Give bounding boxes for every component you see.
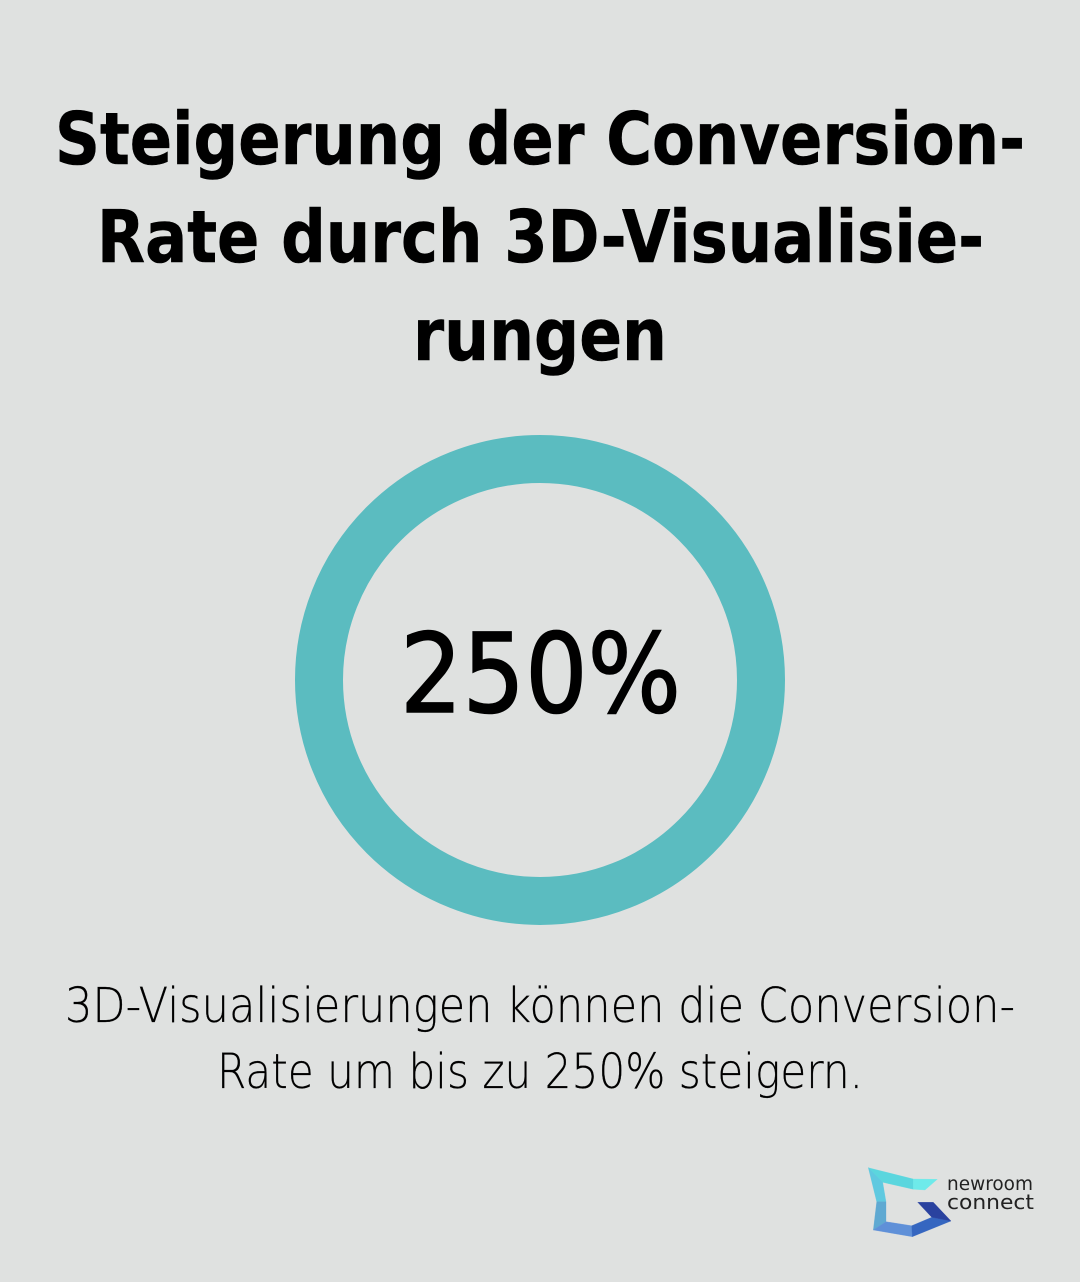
title	[55, 97, 1025, 377]
logo wordmark: newroom	[947, 1174, 1033, 1195]
description text	[65, 978, 1015, 1100]
stat value: 250%	[400, 610, 681, 738]
title: rungen	[413, 293, 667, 377]
ring chart: 250%	[319, 459, 761, 901]
logo wordmark	[947, 1174, 1034, 1214]
description text: Rate um bis zu 250% steigern.	[217, 1044, 863, 1100]
logo wordmark: connect	[947, 1190, 1034, 1214]
icon: logo mark	[868, 1168, 951, 1237]
logo: newroom connect	[868, 1168, 1034, 1237]
